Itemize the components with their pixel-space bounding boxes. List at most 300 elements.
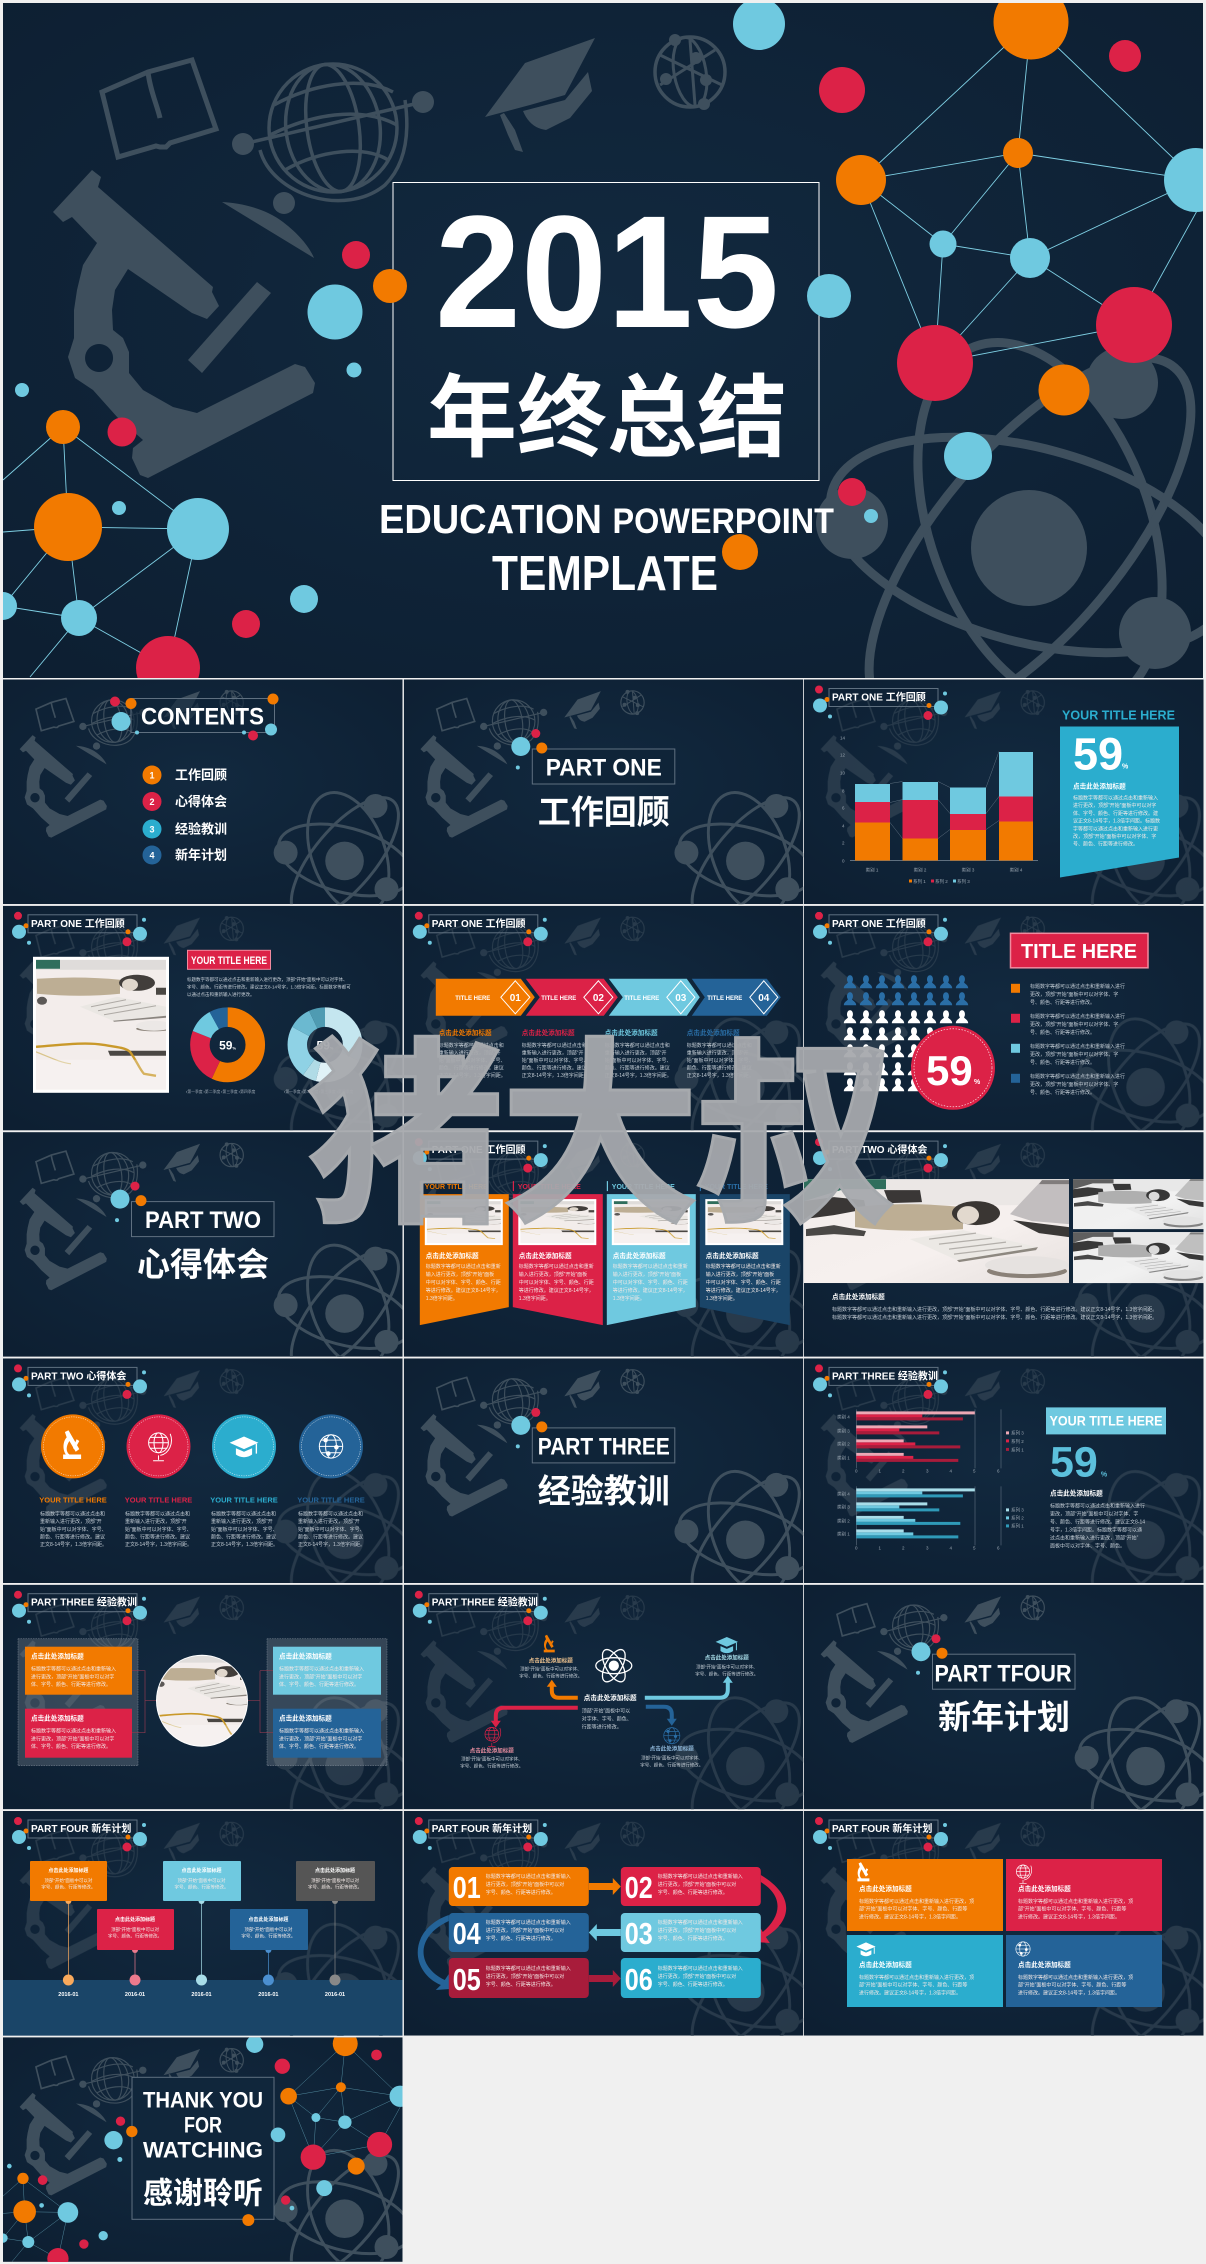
step 05: 字号、颜色、行距等进行修改。 — [486, 1981, 556, 1988]
step 05 — [449, 1958, 589, 1998]
banner 3: 输入进行更改，顶部“开始”面板 — [613, 1271, 681, 1278]
branch navy: 字号、颜色、行距等进行修改。 — [640, 1762, 703, 1769]
slide: people pictogram — [804, 906, 1206, 1162]
body text: 标题数字等都可以通过点击和重新输入进行更改，顶部“开始”面板中可以对字体、 — [187, 976, 348, 983]
step 02: 标题数字等都可以通过点击和重新输入 — [658, 1873, 743, 1880]
circle item 3 — [210, 1414, 278, 1548]
blue bar chart: 6 — [997, 1545, 1000, 1550]
step 06: 进行更改，顶部“开始”面板中可以对 — [658, 1973, 736, 1980]
chevron arrows: TITLE HERE — [624, 996, 659, 1002]
box cyan: 体、字号、颜色、行距等进行修改。 — [279, 1681, 359, 1688]
contents heading: CONTENTS — [141, 704, 264, 730]
slide: photo with four boxes — [3, 1585, 419, 1841]
timeline dates: 2016-01 — [191, 1992, 212, 1998]
slide: cover — [3, 3, 1203, 678]
stat text: 面板中可以对字体、字号、颜色。 — [1050, 1542, 1125, 1549]
box cyan: 标题数字等都可以通过点击和重新输入 — [279, 1666, 364, 1673]
stacked bar chart: 10 — [840, 770, 846, 776]
box cyan — [273, 1647, 381, 1695]
cover subtitle line two: TEMPLATE — [492, 547, 718, 601]
stacked bar chart: 系列 1 — [913, 878, 926, 885]
banner 2 — [513, 1181, 603, 1325]
slide: part four — [804, 1585, 1206, 1841]
thank you text: WATCHING — [143, 2137, 263, 2162]
circle item 2: YOUR TITLE HERE — [125, 1495, 192, 1504]
banner 4: YOUR TITLE HERE — [705, 1184, 768, 1191]
slide: donut charts — [3, 906, 419, 1162]
step 06 — [621, 1958, 761, 1998]
section subtitle: 经验教训 — [538, 1472, 670, 1509]
step 01: 进行更改，顶部“开始”面板中可以对 — [486, 1881, 564, 1888]
circle item 3: 重新输入进行更改，顶部“开 — [211, 1518, 273, 1525]
banner 4: 标题数字等都可以通过点击和重新 — [706, 1263, 781, 1270]
step 03: 进行更改，顶部“开始”面板中可以对 — [658, 1927, 736, 1934]
branch red — [460, 1727, 523, 1770]
banner 1: 标题数字等都可以通过点击和重新 — [426, 1263, 501, 1270]
contents list: 4 — [149, 850, 155, 860]
red bar chart: 类别 3 — [837, 1427, 850, 1434]
box red: 进行更改，顶部“开始”面板中可以对字 — [31, 1735, 114, 1742]
step 02: 字号、颜色、行距等进行修改。 — [658, 1889, 728, 1896]
step 04: 字号、颜色、行距等进行修改。 — [486, 1935, 556, 1942]
banner 4: 1.3倍字间距。 — [706, 1295, 738, 1302]
banner 3: 点击此处添加标题 — [613, 1251, 666, 1260]
title tag: TITLE HERE — [1021, 941, 1137, 963]
panel title: YOUR TITLE HERE — [1062, 708, 1175, 722]
section subtitle: 工作回顾 — [538, 794, 670, 830]
donut chart 2 — [297, 1017, 353, 1072]
banner 4 — [700, 1181, 790, 1325]
box 1: 点击此处添加标题 — [48, 1867, 88, 1874]
column 2 text: 颜色、行距等进行修改。建议 — [522, 1065, 587, 1072]
timeline stems — [68, 1901, 335, 1980]
branch cyan: 点击此处添加标题 — [705, 1654, 749, 1662]
branch orange: 点击此处添加标题 — [529, 1657, 573, 1665]
59 percent badge: 59 — [926, 1047, 973, 1094]
blue bar chart: 5 — [973, 1545, 976, 1550]
box 2: 顶部“开始”面板中可以对 — [111, 1926, 159, 1933]
branch cyan: 顶部“开始”面板中可以对字体、 — [696, 1664, 758, 1671]
contents list: 工作回顾 — [175, 768, 227, 782]
circle item 2: 正文8-14号字，1.3倍字间距。 — [125, 1541, 192, 1548]
column 1 text: 始”面板中可以对字体、字号、 — [439, 1057, 505, 1064]
tile orange: 部“开始”面板中可以对字体、字号、颜色、行距等 — [859, 1906, 967, 1913]
box 3: 字号、颜色、行距等修改。 — [174, 1884, 228, 1890]
section title: PART TWO — [145, 1207, 261, 1234]
contents list — [142, 766, 227, 864]
blue bar chart: 3 — [926, 1545, 929, 1550]
59 percent badge — [911, 1026, 995, 1110]
circle item 1: 颜色、行距等进行修改。建议 — [40, 1534, 105, 1541]
branch orange: 字号、颜色、行距等进行修改。 — [519, 1673, 582, 1680]
box 3: 点击此处添加标题 — [181, 1867, 222, 1874]
circle item 2: 始”面板中可以对字体、字号、 — [125, 1526, 192, 1533]
red bar chart — [837, 1409, 1024, 1473]
column 2 text: 重新输入进行更改，顶部“开 — [522, 1049, 583, 1056]
donut chart 2: 59% — [317, 1038, 334, 1052]
chevron arrows: TITLE HERE — [541, 996, 576, 1002]
timeline dates: 2016-01 — [325, 1992, 345, 1998]
red bar chart: 系列 3 — [1011, 1429, 1024, 1436]
step 03: 03 — [625, 1916, 653, 1951]
box orange: 点击此处添加标题 — [31, 1652, 84, 1661]
slide: four circles — [3, 1358, 419, 1614]
slide: timeline — [3, 1811, 419, 2067]
banner 3 — [607, 1181, 696, 1325]
circle item 2: 颜色、行距等进行修改。建议 — [125, 1534, 190, 1541]
box cyan: 点击此处添加标题 — [279, 1652, 332, 1661]
tile red: 部“开始”面板中可以对字体、字号、颜色、行距等 — [1018, 1906, 1126, 1913]
box 5: 字号、颜色、行距等修改。 — [308, 1884, 362, 1890]
box 3: 顶部“开始”面板中可以对 — [178, 1877, 226, 1884]
timeline dates — [58, 1992, 345, 1998]
tile navy — [1006, 1935, 1162, 2007]
tile cyan: 点击此处添加标题 — [859, 1960, 912, 1969]
caption: 标题数字等都可以通过点击和重新输入进行更改，顶部“开始”面板中可以对字体、字号、颜色、行距等进行修改。建议正文8-14号字，1.3倍字间距。 — [832, 1306, 1157, 1313]
step 01: 字号、颜色、行距等进行修改。 — [486, 1889, 556, 1896]
circle item 4: YOUR TITLE HERE — [297, 1495, 365, 1504]
branch red: 顶部“开始”面板中可以对字体、 — [461, 1756, 523, 1763]
red bar chart: 类别 1 — [837, 1454, 850, 1461]
red bar chart: 5 — [973, 1468, 976, 1473]
box 4: 顶部“开始”面板中可以对 — [244, 1926, 293, 1933]
stacked bar chart: 6 — [842, 806, 845, 810]
stacked bar chart: 系列 2 — [935, 878, 948, 885]
column 3 text: 标题数字等都可以通过点击和 — [605, 1042, 670, 1049]
stat text: 更改，顶部“开始”面板中可以对字体、字 — [1050, 1510, 1138, 1517]
people pictogram — [844, 975, 968, 1091]
circle item 4: 标题数字等都可以通过点击和 — [298, 1510, 363, 1517]
header text: PART TWO 心得体会 — [31, 1369, 126, 1382]
circle item 1 — [39, 1414, 107, 1548]
tile cyan: 进行修改。建议正文8-14号字，1.3倍字间距。 — [859, 1989, 961, 1996]
column 1 text: 颜色、行距等进行修改。建议 — [439, 1065, 504, 1072]
step 03: 标题数字等都可以通过点击和重新输入 — [658, 1919, 743, 1926]
chinese thanks: 感谢聆听 — [143, 2177, 263, 2210]
center text: 行距等进行修改。 — [582, 1724, 622, 1731]
column 1 text: 标题数字等都可以通过点击和 — [439, 1042, 504, 1049]
red bar chart: 类别 2 — [837, 1440, 850, 1447]
stacked bar chart: 8 — [842, 788, 845, 794]
circle item 3: 颜色、行距等进行修改。建议 — [211, 1534, 276, 1541]
circle item 4: 颜色、行距等进行修改。建议 — [298, 1534, 363, 1541]
section title: PART THREE — [538, 1433, 670, 1460]
header text: PART THREE 经验教训 — [432, 1596, 538, 1609]
center text: 对字体、字号、颜色、 — [582, 1716, 632, 1723]
column 3 text: 始”面板中可以对字体、字号、 — [605, 1057, 671, 1064]
blue bar chart: 系列 1 — [1011, 1522, 1024, 1529]
callout panel: 标题数字等都可以通过点击和重新输入 — [1073, 794, 1158, 802]
column 4 text: 标题数字等都可以通过点击和 — [687, 1042, 752, 1049]
tile orange: 点击此处添加标题 — [859, 1884, 912, 1893]
stat text: 过点击和重新输入进行更改，顶部“开始” — [1050, 1534, 1139, 1541]
legend list: 标题数字等都可以通过点击和重新输入进行 — [1030, 1043, 1125, 1050]
chevron arrows: 04 — [758, 993, 770, 1004]
connectors — [132, 1671, 273, 1733]
callout panel: 进行更改，顶部“开始”面板中可以对字 — [1073, 802, 1156, 809]
banner 1: YOUR TITLE HERE — [425, 1184, 488, 1191]
title tag — [188, 950, 270, 969]
banner 1: 输入进行更改，顶部“开始”面板 — [426, 1271, 494, 1278]
step 02: 进行更改，顶部“开始”面板中可以对 — [658, 1881, 736, 1888]
red bar chart: 4 — [950, 1468, 952, 1473]
tile cyan: 标题数字等都可以通过点击和重新输入进行更改，顶 — [859, 1974, 974, 1981]
column 4 text: 重新输入进行更改，顶部“开 — [687, 1049, 748, 1056]
contents list: 3 — [149, 824, 155, 834]
box navy: 标题数字等都可以通过点击和重新输入 — [279, 1728, 364, 1735]
box red: 点击此处添加标题 — [31, 1714, 84, 1723]
tile red: 点击此处添加标题 — [1018, 1884, 1071, 1893]
donut legends: ▪第一季度 ▪第二季度 ▪第三季度 ▪第四季度 — [186, 1089, 256, 1094]
column 2 text: 始”面板中可以对字体、字号、 — [522, 1057, 588, 1064]
contents list: 1 — [149, 770, 155, 780]
header text: PART FOUR 新年计划 — [31, 1822, 131, 1835]
step 06: 字号、颜色、行距等进行修改。 — [658, 1981, 728, 1988]
circle item 2: 标题数字等都可以通过点击和 — [125, 1510, 190, 1517]
red bar chart: 系列 2 — [1011, 1438, 1024, 1445]
column 3 text: 重新输入进行更改，顶部“开 — [605, 1049, 666, 1056]
column 2 text: 标题数字等都可以通过点击和 — [522, 1042, 587, 1049]
blue bar chart: 4 — [950, 1545, 952, 1550]
column 1 text: 重新输入进行更改，顶部“开 — [439, 1049, 500, 1056]
cover chinese title: 年终总结 — [427, 369, 787, 469]
box 2 — [97, 1909, 174, 1950]
banner 2: 中可以对字体、字号、颜色、行距 — [519, 1279, 594, 1286]
column 1 text: 点击此处添加标题 — [439, 1028, 492, 1037]
legend list — [1011, 983, 1125, 1096]
blue bar chart — [837, 1486, 1024, 1550]
stacked bar chart: 类别 1 — [866, 866, 879, 874]
banner 2: 点击此处添加标题 — [519, 1251, 572, 1260]
box 4 — [230, 1909, 308, 1950]
slide: branching diagram — [404, 1585, 820, 1841]
branch red: 字号、颜色、行距等进行修改。 — [460, 1763, 523, 1770]
box orange: 进行更改，顶部“开始”面板中可以对字 — [31, 1673, 114, 1680]
timeline dates: 2016-01 — [125, 1992, 145, 1998]
section title: PART TFOUR — [934, 1661, 1072, 1688]
timeline dates: 2016-01 — [258, 1992, 278, 1998]
tile navy: 部“开始”面板中可以对字体、字号、颜色、行距等 — [1018, 1982, 1126, 1989]
box 2: 字号、颜色、行距等修改。 — [108, 1932, 162, 1940]
branch navy: 顶部“开始”面板中可以对字体、 — [641, 1755, 703, 1762]
stacked bar chart: 0 — [842, 858, 845, 864]
chevron arrows: 03 — [675, 993, 687, 1004]
branch cyan: 字号、颜色、行距等进行修改。 — [695, 1671, 758, 1678]
circle item 1: 重新输入进行更改，顶部“开 — [40, 1518, 102, 1525]
caption: 标题数字等都可以通过点击和重新输入进行更改，顶部“开始”面板中可以对字体、字号、颜色、行距等进行修改。建议正文8-14号字，1.3倍字间距。 — [832, 1314, 1157, 1321]
chevron arrows: 02 — [593, 993, 604, 1004]
stacked bar chart: 类别 4 — [1010, 866, 1023, 874]
legend list: 号、颜色、行距等进行修改。 — [1030, 999, 1095, 1006]
stat text — [1050, 1488, 1145, 1549]
59 percent badge: % — [974, 1079, 981, 1086]
cover year: 2015 — [435, 182, 779, 361]
banner 1: 点击此处添加标题 — [426, 1251, 479, 1260]
thank you text: THANK YOU — [143, 2087, 263, 2112]
box 5: 点击此处添加标题 — [315, 1867, 355, 1874]
slide: part one — [404, 680, 804, 904]
stacked bar chart — [840, 736, 1038, 885]
banner 2: 1.3倍字间距。 — [519, 1295, 551, 1302]
box 2: 点击此处添加标题 — [115, 1916, 155, 1923]
photo — [33, 957, 172, 1093]
circle item 4: 重新输入进行更改，顶部“开 — [298, 1518, 360, 1525]
slide: thank you — [0, 2031, 419, 2264]
chevron arrows: TITLE HERE — [707, 996, 742, 1002]
callout panel: 点击此处添加标题 — [1073, 782, 1126, 790]
stacked bar chart: 类别 3 — [962, 866, 975, 874]
banner 3: 1.3倍字间距。 — [613, 1295, 645, 1302]
step 02: 02 — [625, 1870, 653, 1905]
legend list: 更改，顶部“开始”面板中可以对字体、字 — [1030, 991, 1118, 998]
box navy — [273, 1709, 381, 1758]
contents heading — [110, 694, 278, 740]
donut chart 1 — [200, 1017, 255, 1072]
banner 2: 等进行修改。建议正文8-14号字， — [519, 1287, 594, 1294]
step 04: 04 — [453, 1916, 481, 1951]
title tag — [1046, 1407, 1166, 1434]
step 05: 标题数字等都可以通过点击和重新输入 — [486, 1965, 571, 1972]
column 4 text: 正文8-14号字，1.3倍字间距。 — [687, 1072, 754, 1079]
circle item 3: YOUR TITLE HERE — [210, 1495, 278, 1504]
legend list: 号、颜色、行距等进行修改。 — [1030, 1089, 1095, 1096]
header text: PART ONE 工作回顾 — [31, 917, 125, 930]
box 1: 字号、颜色、行距等修改。 — [41, 1884, 95, 1890]
round photo — [156, 1655, 251, 1747]
tile cyan: 部“开始”面板中可以对字体、字号、颜色、行距等 — [859, 1982, 967, 1989]
slide: bar charts — [804, 1358, 1206, 1614]
slide: part three — [404, 1358, 820, 1614]
tile navy: 标题数字等都可以通过点击和重新输入进行更改，顶 — [1018, 1974, 1133, 1981]
circle item 3: 正文8-14号字，1.3倍字间距。 — [211, 1541, 278, 1548]
column 2 text: 点击此处添加标题 — [522, 1028, 575, 1037]
banner 3: 标题数字等都可以通过点击和重新 — [613, 1263, 688, 1270]
chevron arrows — [436, 979, 781, 1016]
contents list: 心得体会 — [175, 794, 227, 809]
header text: PART FOUR 新年计划 — [432, 1822, 532, 1835]
stacked bar chart: 4 — [842, 824, 845, 828]
step 02 — [621, 1867, 761, 1906]
column 3 text — [605, 1028, 672, 1079]
circle item 4: 始”面板中可以对字体、字号、 — [298, 1526, 365, 1533]
box 3 — [163, 1861, 241, 1901]
thank you text — [143, 2087, 263, 2162]
banner 3: YOUR TITLE HERE — [612, 1184, 675, 1191]
tile navy: 点击此处添加标题 — [1018, 1960, 1071, 1969]
stat text: 点击此处添加标题 — [1050, 1488, 1103, 1497]
blue bar chart: 1 — [878, 1545, 882, 1550]
cover title frame — [393, 182, 819, 480]
stacked bar chart: 14 — [840, 736, 846, 740]
banner 4: 输入进行更改，顶部“开始”面板 — [706, 1271, 774, 1278]
donut legends: ▪第一季度 ▪第二季度 ▪第三季度 ▪第四季度 — [284, 1089, 354, 1094]
column 3 text: 点击此处添加标题 — [605, 1028, 658, 1037]
banner 4: 中可以对字体、字号、颜色、行距 — [706, 1279, 781, 1286]
molecule network — [0, 2031, 411, 2264]
box 4: 字号、颜色、行距等修改。 — [241, 1932, 295, 1940]
timeline band — [3, 1980, 402, 2036]
legend list: 号、颜色、行距等进行修改。 — [1030, 1059, 1095, 1066]
stacked bar chart: 类别 2 — [914, 866, 927, 874]
column 1 text — [439, 1028, 506, 1079]
section subtitle: 心得体会 — [137, 1246, 269, 1283]
circle item 4 — [297, 1414, 365, 1548]
tile cyan — [847, 1935, 1003, 2007]
donut chart 1: 59% — [219, 1038, 236, 1052]
box 1 — [30, 1861, 107, 1901]
red bar chart: 6 — [997, 1468, 1000, 1473]
stat text: 号字，1.3倍字间距。标题数字等都可以通 — [1050, 1526, 1142, 1533]
tile orange — [847, 1859, 1003, 1931]
branch navy: 点击此处添加标题 — [650, 1745, 694, 1753]
header text: PART THREE 经验教训 — [31, 1596, 137, 1609]
banner 1: 等进行修改。建议正文8-14号字， — [426, 1287, 501, 1294]
stacked bar chart: 12 — [840, 752, 846, 758]
circle item 1: YOUR TITLE HERE — [39, 1495, 107, 1504]
tile red: 进行修改。建议正文8-14号字，1.3倍字间距。 — [1018, 1913, 1120, 1920]
slide: photo gallery — [804, 1132, 1206, 1388]
callout panel: 议正文8-14号字，1.3倍字间距。标题数 — [1073, 818, 1160, 825]
red bar chart: 类别 4 — [837, 1413, 850, 1420]
contents list: 新年计划 — [175, 848, 227, 862]
banner 1: 1.3倍字间距。 — [426, 1295, 458, 1302]
stacked bar chart: 系列 3 — [957, 878, 970, 885]
stat text: 标题数字等都可以通过点击和重新输入进行 — [1050, 1502, 1145, 1509]
legend list: 标题数字等都可以通过点击和重新输入进行 — [1030, 983, 1125, 990]
cover subtitle: EDUCATION POWERPOINT — [379, 496, 834, 542]
box 5: 顶部“开始”面板中可以对 — [311, 1877, 359, 1884]
arrows — [496, 1682, 728, 1722]
header text: PART ONE 工作回顾 — [432, 917, 526, 930]
callout panel: 59 — [1073, 728, 1123, 780]
red bar chart: 系列 1 — [1011, 1446, 1024, 1453]
circle item 3: 标题数字等都可以通过点击和 — [211, 1510, 276, 1517]
callout panel: % — [1122, 764, 1129, 770]
box cyan: 进行更改，顶部“开始”面板中可以对字 — [279, 1673, 362, 1680]
header text: PART ONE 工作回顾 — [832, 690, 926, 704]
step 05: 进行更改，顶部“开始”面板中可以对 — [486, 1973, 564, 1980]
blue bar chart: 2 — [902, 1545, 905, 1550]
column 2 text — [522, 1028, 589, 1079]
flow arrows — [418, 1875, 786, 1990]
step 04: 进行更改，顶部“开始”面板中可以对 — [486, 1927, 564, 1934]
tile red — [1006, 1859, 1162, 1931]
step 06: 06 — [625, 1962, 653, 1997]
contents list: 2 — [149, 797, 155, 807]
center text: 顶部“开始”面板中可以 — [582, 1708, 630, 1715]
step 05: 05 — [453, 1962, 481, 1997]
slide: four tiles — [804, 1811, 1206, 2067]
column 4 text: 始”面板中可以对字体、字号、 — [687, 1057, 753, 1064]
blue bar chart: 系列 3 — [1011, 1506, 1024, 1513]
step 01: 标题数字等都可以通过点击和重新输入 — [486, 1873, 571, 1880]
circle item 1: 始”面板中可以对字体、字号、 — [40, 1526, 107, 1533]
branch red: 点击此处添加标题 — [470, 1747, 514, 1755]
chevron arrows: TITLE HERE — [455, 996, 490, 1002]
column 4 text: 点击此处添加标题 — [687, 1028, 740, 1037]
watermark: 猪大叔 — [305, 1026, 895, 1249]
circle item 4: 正文8-14号字，1.3倍字间距。 — [298, 1541, 365, 1548]
photos — [804, 1178, 1204, 1283]
blue bar chart: 类别 1 — [837, 1530, 850, 1537]
header text: PART THREE 经验教训 — [832, 1369, 938, 1382]
header text: PART FOUR 新年计划 — [832, 1822, 932, 1835]
banner 2: YOUR TITLE HERE — [518, 1184, 581, 1191]
banner 1 — [420, 1181, 509, 1325]
red bar chart: 2 — [902, 1468, 905, 1473]
banner 2: 标题数字等都可以通过点击和重新 — [519, 1263, 594, 1270]
title tag: YOUR TITLE HERE — [1050, 1413, 1162, 1428]
